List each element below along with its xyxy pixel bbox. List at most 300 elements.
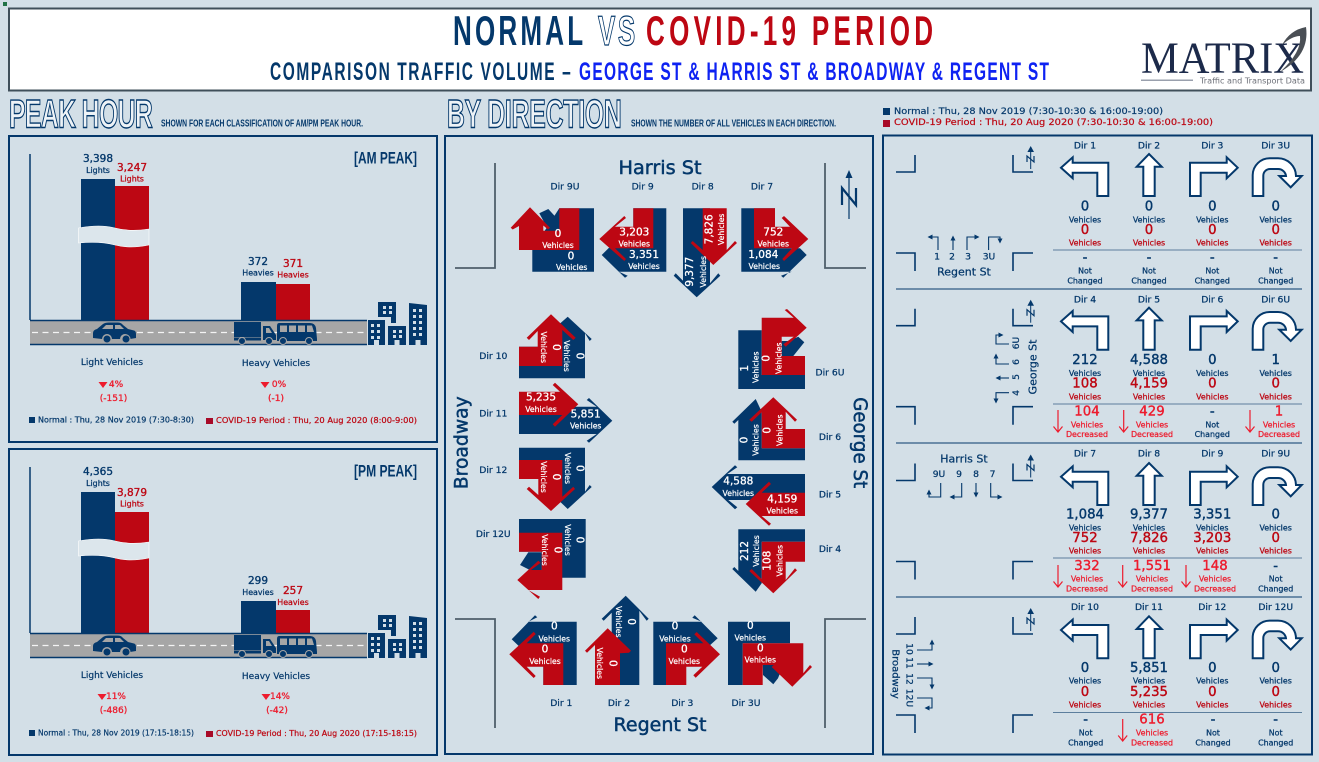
Dir 5: [1119, 294, 1173, 439]
Dir 9: Dir 9: [632, 182, 654, 192]
Dir 12U: -: [1273, 712, 1278, 728]
title: VS: [598, 8, 635, 54]
header panel: [9, 8, 1311, 90]
Dir 10: Changed: [1068, 738, 1103, 748]
Dir 11: 5,235: [526, 392, 556, 404]
Dir 3: 0: [1208, 223, 1217, 238]
Dir 2: Vehicles: [614, 606, 623, 637]
Dir 4: Vehicles: [776, 545, 784, 576]
inset: George St key: 5: [1011, 374, 1022, 380]
bar chart: PM: 299: [248, 575, 268, 587]
bar chart: PM: Heavies: [242, 588, 274, 597]
Dir 9: Vehicles: [1196, 546, 1228, 556]
Dir 11: [479, 383, 612, 443]
Dir 3: 0: [672, 621, 678, 633]
street labels: George St: [849, 397, 871, 488]
Dir 11: 616: [1139, 712, 1165, 728]
Dir 1: Vehicles: [1069, 216, 1101, 224]
Dir 9U: [511, 182, 594, 272]
Dir 5: Vehicles: [1133, 392, 1165, 402]
inset: Regent St key: [896, 146, 1034, 278]
Dir 8: 7,826: [703, 214, 715, 244]
Dir 6: 0: [762, 427, 774, 434]
Dir 6U: Decreased: [1258, 430, 1300, 439]
Dir 7: Vehicles: [1069, 524, 1101, 532]
Dir 6U: 0: [1271, 376, 1280, 392]
light vehicles change: [81, 671, 143, 716]
Dir 3: Changed: [1195, 276, 1230, 286]
heading: By Direction: [447, 93, 836, 137]
Dir 4: Vehicles: [752, 535, 761, 567]
bar chart: AM: [30, 153, 310, 320]
bar chart: AM: 372: [248, 256, 268, 268]
Dir 3U: Changed: [1258, 276, 1293, 286]
Dir 4: Decreased: [1066, 430, 1108, 439]
Dir 5: Decreased: [1131, 430, 1173, 439]
heading: By Direction: SHOWN THE NUMBER OF ALL VEHICLES IN EACH DIRECTION.: [631, 118, 836, 130]
light vehicles change: (-151): [100, 394, 127, 404]
inset: Broadway key: 12U: [904, 689, 914, 707]
Dir 6U: Vehicles: [752, 352, 760, 383]
Dir 9: Vehicles: [1196, 524, 1228, 532]
road with vehicles: [30, 320, 367, 344]
Dir 2: 0: [607, 660, 619, 667]
light vehicles change: Light Vehicles: [81, 358, 143, 368]
inset: Regent St key: Regent St: [937, 266, 992, 278]
Dir 12: Not: [1206, 728, 1220, 738]
inset: Harris St key: 9U: [933, 469, 945, 480]
label: PM peak: [PM PEAK]: [354, 462, 417, 480]
Dir 12U: 0: [1271, 685, 1280, 700]
inset: George St key: 6: [1011, 359, 1022, 365]
Dir 1: 0: [1081, 200, 1089, 214]
Dir 10: -: [1083, 712, 1088, 728]
Dir 4: Vehicles: [1069, 369, 1101, 378]
Dir 12U: Not: [1269, 728, 1283, 738]
Dir 5: Dir 5: [1138, 294, 1160, 306]
Dir 9U: 0: [1271, 508, 1280, 522]
Dir 10: Dir 10: [1071, 602, 1099, 613]
Dir 9U: [1253, 448, 1302, 594]
Dir 11: 5,851: [571, 408, 601, 420]
Dir 12: 0: [550, 474, 562, 480]
bar chart: AM: Heavies: [242, 268, 274, 278]
Dir 2: 0: [1145, 200, 1153, 214]
subtitle: GEORGE ST & HARRIS ST & BROADWAY & REGENT ST: [579, 58, 1049, 86]
Dir 12: Vehicles: [539, 461, 548, 493]
Dir 10: 0: [1081, 661, 1089, 676]
Dir 10: Not: [1079, 728, 1093, 738]
Dir 6U: 1: [739, 365, 751, 372]
Dir 2: Vehicles: [595, 648, 604, 679]
Dir 6: 0: [738, 437, 750, 443]
Dir 9U: 0: [568, 251, 574, 263]
Dir 12: Dir 12: [479, 465, 507, 476]
Dir 2: 0: [1145, 223, 1153, 238]
Dir 5: 4,588: [1130, 353, 1168, 368]
Dir 4: [1054, 294, 1108, 439]
Dir 6: 0: [1208, 376, 1217, 392]
Dir 8: Dir 8: [1138, 448, 1160, 460]
Dir 12: Vehicles: [563, 453, 572, 484]
Dir 12U: 0: [573, 537, 585, 543]
label: AM peak: [AM PEAK]: [354, 148, 417, 168]
Dir 6U: Vehicles: [774, 343, 784, 374]
Dir 4: 104: [1074, 404, 1100, 420]
Dir 12U: 0: [552, 547, 564, 553]
light vehicles change: 4%: [109, 380, 124, 390]
heavy vehicles change: Heavy Vehicles: [242, 672, 310, 682]
inset: Broadway key: 11: [904, 657, 914, 669]
Dir 12U: 0: [1271, 661, 1280, 676]
Dir 1: Not: [1078, 266, 1092, 276]
Dir 2: Changed: [1131, 276, 1167, 286]
Dir 7: Dir 7: [751, 182, 773, 192]
Dir 3U: Dir 3U: [1261, 140, 1290, 152]
Dir 4: Vehicles: [1071, 420, 1103, 430]
Dir 3: Vehicles: [1196, 238, 1228, 248]
Dir 7: 752: [1072, 531, 1098, 546]
logo: Matrix: MATRIX: [1141, 34, 1304, 82]
Dir 8: 9,377: [1130, 508, 1168, 522]
Dir 3U: [1253, 140, 1302, 286]
Dir 1: Vehicles: [529, 657, 561, 666]
Dir 10: [1061, 602, 1108, 748]
Dir 7: 1,084: [1066, 508, 1104, 522]
Dir 12U: Dir 12U: [476, 529, 511, 540]
Dir 11: Vehicles: [1136, 728, 1168, 738]
Dir 8: [674, 182, 737, 297]
Dir 12U: [1253, 602, 1302, 748]
Dir 1: Dir 1: [550, 698, 572, 709]
Dir 10: Vehicles: [1069, 676, 1101, 686]
Dir 2: -: [1147, 250, 1152, 266]
Dir 11: Dir 11: [1135, 602, 1163, 613]
heavy vehicles change: (-1): [268, 394, 284, 404]
bar chart: PM: 3,879: [117, 487, 147, 499]
Dir 3U: Dir 3U: [732, 698, 760, 709]
Dir 12U: Dir 12U: [1258, 602, 1293, 613]
Dir 6U: 1: [1271, 353, 1280, 368]
Dir 3: -: [1210, 250, 1215, 266]
legend: AM: COVID-19 Period : Thu, 20 Aug 2020 (8:00-9:00): [216, 416, 417, 425]
Dir 12: Vehicles: [1196, 700, 1228, 710]
Dir 3: Dir 3: [1201, 140, 1224, 152]
Dir 6: Vehicles: [1196, 369, 1228, 378]
subtitle: [270, 58, 1049, 86]
bar chart: PM: [30, 466, 310, 633]
Dir 5: 4,588: [723, 476, 753, 488]
icon: north arrow: [842, 170, 856, 219]
Dir 6: Vehicles: [776, 415, 784, 446]
Dir 12: [1190, 602, 1238, 748]
legend: AM: [29, 416, 417, 425]
Dir 8: Vehicles: [1133, 546, 1165, 556]
Dir 3: Vehicles: [659, 634, 691, 644]
Dir 3U: [728, 620, 812, 709]
Dir 11: Dir 11: [479, 408, 507, 420]
Dir 10: 0: [573, 353, 585, 359]
Dir 6U: Dir 6U: [816, 368, 844, 378]
road with vehicles: [30, 633, 367, 658]
Dir 7: Decreased: [1066, 584, 1108, 594]
Dir 7: Vehicles: [1071, 574, 1103, 584]
Dir 6: Not: [1205, 420, 1219, 430]
heavy vehicles change: 0%: [272, 380, 287, 390]
Dir 9U: Changed: [1258, 584, 1293, 594]
row: Regent St: [896, 140, 1302, 286]
Dir 8: Decreased: [1131, 584, 1173, 594]
Dir 9: [1182, 448, 1238, 594]
bar chart: AM: Heavies: [277, 270, 309, 280]
bar chart: PM: 257: [283, 585, 303, 597]
Dir 2: Not: [1142, 266, 1156, 276]
panel: intersection by direction: [445, 136, 873, 754]
Dir 4: 212: [739, 541, 751, 561]
Dir 10: Vehicles: [1069, 700, 1101, 710]
inset: Harris St key: 9: [956, 469, 962, 480]
icon: buildings: [368, 615, 427, 658]
Dir 6: Vehicles: [1196, 392, 1228, 402]
bar chart: AM: Lights: [120, 174, 144, 184]
Dir 9: [599, 182, 666, 278]
Dir 3U: -: [1273, 250, 1278, 266]
title: COVID-19 PERIOD: [646, 8, 933, 54]
bar chart: PM: Lights: [120, 500, 144, 508]
Dir 12: 0: [573, 465, 585, 472]
Dir 3: Vehicles: [669, 657, 700, 666]
Dir 6: Vehicles: [752, 424, 760, 456]
Dir 8: Vehicles: [699, 256, 708, 287]
Dir 1: 0: [1081, 223, 1089, 238]
Dir 8: 1,551: [1133, 559, 1171, 574]
Dir 12: 0: [1208, 685, 1217, 700]
street labels: Broadway: [451, 396, 473, 489]
Dir 7: 752: [763, 226, 783, 238]
panel: AM peak: [9, 136, 437, 442]
Dir 3: 0: [1208, 200, 1217, 214]
bar chart: AM: 371: [283, 258, 303, 270]
Dir 9: Dir 9: [1201, 448, 1224, 460]
Dir 8: Vehicles: [1136, 574, 1168, 584]
Dir 1: [509, 615, 577, 709]
Dir 12: Vehicles: [1196, 676, 1228, 686]
Dir 3U: 0: [747, 620, 754, 632]
Dir 3U: Vehicles: [745, 656, 776, 664]
light vehicles change: (-486): [100, 706, 127, 716]
Dir 3: Not: [1205, 266, 1219, 276]
legend: PM: COVID-19 Period : Thu, 20 Aug 2020 (17:15-18:15): [216, 729, 417, 738]
legend: PM: [29, 728, 417, 738]
Dir 6: [1190, 294, 1238, 439]
Dir 3U: 0: [1271, 223, 1280, 238]
Dir 12U: Vehicles: [563, 524, 572, 556]
Dir 6U: [1246, 294, 1302, 439]
Dir 2: [585, 596, 649, 709]
Dir 5: Vehicles: [723, 489, 754, 498]
Dir 4: Dir 4: [1074, 294, 1096, 306]
Dir 1: Vehicles: [1069, 238, 1101, 248]
Dir 6: 0: [1208, 353, 1217, 368]
Dir 10: 0: [550, 344, 562, 351]
Dir 3U: Not: [1269, 266, 1283, 276]
Dir 10: Vehicles: [539, 332, 548, 363]
Dir 3: [653, 615, 720, 709]
panel: PM peak: [9, 449, 437, 755]
Dir 6U: Dir 6U: [1261, 294, 1290, 306]
Dir 7: [741, 182, 808, 278]
Dir 1: Vehicles: [539, 634, 570, 644]
heavy vehicles change: 14%: [270, 692, 290, 702]
Dir 1: 0: [542, 643, 548, 655]
Dir 11: Vehicles: [1133, 700, 1165, 710]
legend: direction dates: Normal : Thu, 28 Nov 2019 (7:30-10:30 & 16:00-19:00): [894, 107, 1163, 117]
inset: Broadway key: Broadway: [890, 649, 900, 699]
Dir 9U: Vehicles: [1260, 546, 1292, 556]
heading: By Direction: BY DIRECTION: [447, 93, 622, 137]
bar chart: AM: 3,398: [83, 153, 113, 165]
Dir 10: Dir 10: [479, 351, 507, 362]
Dir 2: Dir 2: [1138, 140, 1160, 152]
Dir 12U: Changed: [1258, 738, 1293, 748]
Dir 3: [1190, 140, 1238, 286]
Dir 3: Vehicles: [1196, 216, 1228, 224]
inset: George St key: [896, 300, 1040, 425]
legend: direction dates: [883, 107, 1213, 128]
inset: George St key: 4: [1011, 390, 1022, 396]
Dir 6U: Vehicles: [1260, 392, 1292, 402]
Dir 11: Vehicles: [1133, 676, 1165, 686]
Dir 6U: Vehicles: [1263, 420, 1295, 430]
inset: Regent St key: 1: [934, 252, 940, 262]
Dir 4: 212: [1072, 353, 1098, 368]
Dir 6: Dir 6: [819, 432, 841, 443]
bar chart: PM: Lights: [86, 479, 110, 488]
logo: Matrix: Traffic and Transport Data: [1199, 76, 1305, 86]
Dir 1: 0: [551, 621, 558, 633]
Dir 3: Dir 3: [671, 698, 694, 709]
Dir 6: Changed: [1195, 430, 1230, 439]
legend: PM: Normal : Thu, 28 Nov 2019 (17:15-18:15): [38, 728, 194, 738]
Dir 12: -: [1211, 712, 1216, 728]
Dir 7: Vehicles: [758, 240, 789, 248]
light vehicles change: [81, 358, 143, 404]
Dir 11: 5,235: [1130, 685, 1168, 700]
Dir 1: -: [1083, 250, 1088, 266]
Dir 12U: [476, 519, 586, 599]
Dir 9: 3,203: [1193, 531, 1231, 546]
Dir 6: [732, 397, 841, 460]
Dir 6U: [738, 309, 844, 389]
Dir 2: Dir 2: [608, 698, 630, 709]
Dir 7: Vehicles: [749, 262, 780, 271]
inset: George St key: George St: [1026, 339, 1040, 394]
row: Broadway: [890, 602, 1302, 748]
legend: direction dates: COVID-19 Period : Thu, 20 Aug 2020 (7:30-10:30 & 16:00-19:00): [894, 118, 1213, 128]
inset: Regent St key: 2: [949, 252, 955, 262]
Dir 5: [712, 465, 841, 526]
Dir 2: Vehicles: [1133, 216, 1165, 224]
inset: Regent St key: 3U: [983, 252, 995, 262]
Dir 5: Vehicles: [1136, 420, 1168, 430]
heavy vehicles change: (-42): [266, 706, 288, 716]
Dir 9: 3,351: [1193, 508, 1231, 522]
Dir 8: 7,826: [1130, 531, 1168, 546]
bar chart: AM: 3,247: [117, 162, 147, 174]
Dir 4: 108: [1072, 376, 1098, 392]
street labels: Regent St: [614, 714, 706, 736]
Dir 9U: Not: [1269, 574, 1283, 584]
Dir 10: 0: [1081, 685, 1089, 700]
Dir 12: [479, 448, 592, 511]
inset: Broadway key: 10: [904, 643, 914, 655]
icon: buildings: [368, 302, 427, 345]
Dir 5: 4,159: [767, 493, 797, 505]
heavy vehicles change: Heavy Vehicles: [242, 359, 310, 369]
Dir 8: Vehicles: [717, 214, 726, 245]
Dir 9U: Vehicles: [542, 241, 574, 250]
title: [453, 8, 933, 54]
Dir 11: Vehicles: [570, 422, 601, 430]
Dir 7: Vehicles: [1069, 546, 1101, 556]
Dir 9: 3,351: [629, 249, 659, 261]
bar chart: PM: Heavies: [277, 598, 309, 607]
Dir 9: 3,203: [619, 226, 649, 238]
Dir 12: Dir 12: [1198, 602, 1226, 613]
light vehicles change: 11%: [106, 692, 126, 702]
Dir 9: Vehicles: [619, 240, 650, 248]
Dir 3U: Vehicles: [1260, 216, 1292, 224]
heading: Peak Hour: SHOWN FOR EACH CLASSIFICATION OF AM/PM PEAK HOUR.: [161, 118, 363, 130]
inset: George St key: 6U: [1011, 337, 1022, 349]
Dir 2: Vehicles: [1133, 238, 1165, 248]
Dir 2: [1131, 140, 1167, 286]
subtitle: COMPARISON TRAFFIC VOLUME –: [270, 58, 571, 86]
Dir 11: 5,851: [1130, 661, 1168, 676]
Dir 9: Decreased: [1194, 584, 1236, 594]
street labels: Harris St: [618, 157, 702, 179]
Dir 4: 108: [762, 551, 774, 571]
Dir 4: [732, 529, 841, 593]
inset: Harris St key: Harris St: [940, 452, 988, 466]
bar chart: AM: Lights: [86, 166, 110, 175]
Dir 9U: 0: [1271, 531, 1280, 546]
Dir 5: Dir 5: [819, 490, 841, 500]
inset: Regent St key: 3: [965, 252, 971, 262]
light vehicles change: Light Vehicles: [81, 671, 143, 681]
Dir 3U: Vehicles: [1260, 238, 1292, 248]
Dir 3U: 0: [757, 642, 764, 654]
row: Harris St: [896, 448, 1302, 594]
Dir 2: 0: [625, 618, 637, 625]
Dir 6: -: [1210, 404, 1215, 420]
panel: direction table: [883, 136, 1312, 754]
Dir 12: 0: [1208, 661, 1217, 676]
Dir 9U: Dir 9U: [551, 182, 579, 192]
Dir 1: Dir 1: [1074, 140, 1096, 152]
title: NORMAL: [453, 8, 583, 54]
Dir 11: [1118, 602, 1173, 748]
Dir 9: Vehicles: [1199, 574, 1231, 584]
Dir 9: 148: [1202, 559, 1228, 574]
Dir 11: Vehicles: [525, 405, 557, 414]
Dir 3U: 0: [1271, 200, 1280, 214]
Dir 7: 1,084: [748, 249, 779, 261]
Dir 8: Dir 8: [692, 182, 714, 192]
heading: Peak Hour: [9, 93, 363, 137]
Dir 3U: Vehicles: [735, 634, 766, 642]
Dir 6U: 0: [761, 355, 773, 362]
